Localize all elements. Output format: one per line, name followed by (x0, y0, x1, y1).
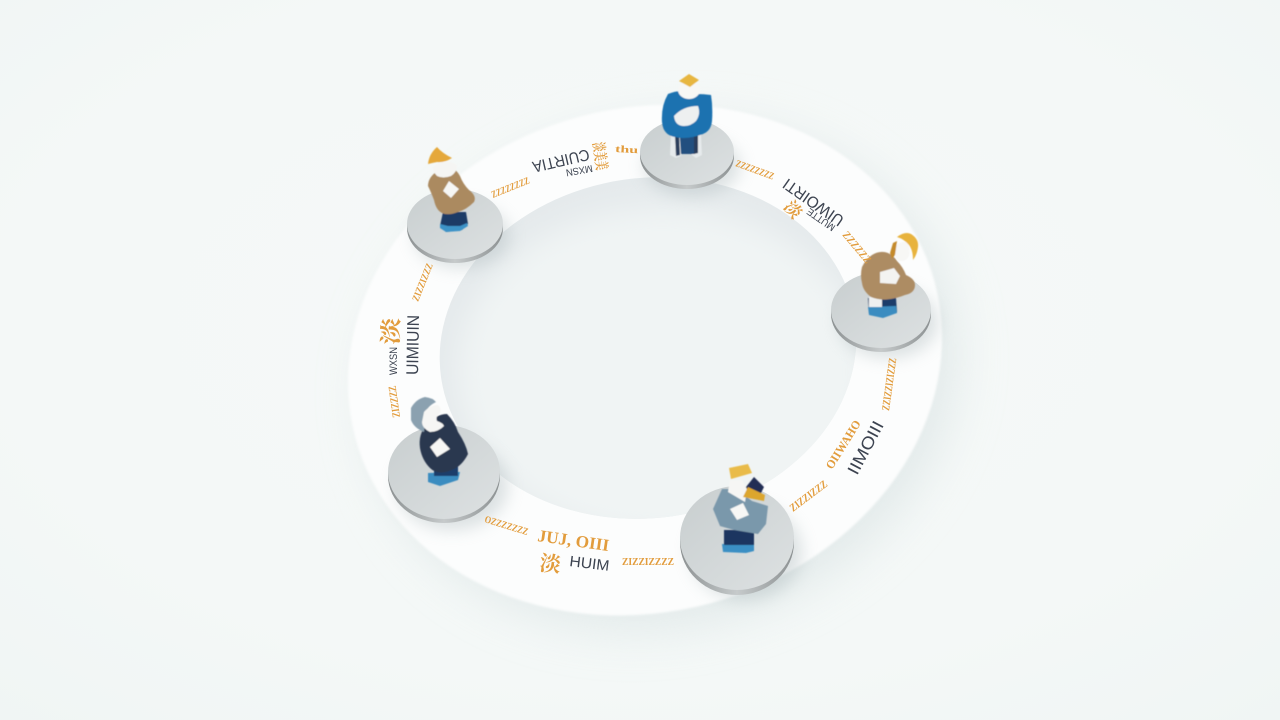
ring label: bottom (483, 514, 674, 577)
ring label: bottom: 淡 (538, 551, 563, 577)
ring label: upper left: MXSN (565, 162, 593, 178)
disc: bottom right (680, 486, 802, 600)
figure: brown, right (861, 233, 918, 318)
ring label: right: ZZIZZIZIZZZ (880, 357, 899, 411)
ring label: upper left: thu (615, 144, 639, 156)
ring label: left: UIMIUIN (403, 315, 423, 375)
ring platform (436, 178, 961, 633)
ring label: right: OIIWAHO (823, 418, 864, 472)
ring label: left: WXSN (388, 347, 400, 375)
disc: right (831, 272, 938, 358)
ring label: upper right: ZZZZZZ (840, 229, 873, 266)
ring label: upper left: CUIRTIA (530, 145, 591, 175)
ring label: upper right: ZZZZZZZZ (734, 158, 776, 183)
ring label: bottom: JUJ, OIII (536, 526, 611, 555)
ring label: right: ZIZZIZZZ (788, 478, 830, 514)
disc: top left (407, 189, 510, 268)
ring label: left (378, 262, 436, 418)
ring label: upper right: UIWOIRTI (780, 175, 847, 229)
figure: brown, top left (428, 147, 475, 232)
ring label: upper left: ZZZZZZZZ (490, 176, 531, 201)
ring label: upper left (490, 141, 639, 201)
figure: navy, bottom left (411, 397, 468, 486)
ring label: upper right: 淡 (780, 197, 806, 223)
ring label: bottom: HUIM (569, 553, 610, 575)
ring inner well (440, 178, 856, 519)
ring label: upper left: 淡美美 (589, 141, 611, 171)
ring label: bottom: OZZZZZZZ (483, 514, 530, 538)
ring label: bottom: ZIZZIZZZZ (622, 557, 674, 568)
ring label: left: ZIZZZZ (387, 385, 403, 418)
ring label: upper right: MUTTE (805, 205, 838, 233)
ring label: upper right (734, 158, 873, 266)
ring label: right: IIMOIII (844, 418, 888, 478)
disc: top (640, 119, 740, 196)
ring label: right (788, 357, 899, 514)
figure: slate, bottom right (713, 464, 768, 553)
ring label: left: 淡 (378, 316, 404, 345)
ring label: left: ZIZZIZZZ (411, 262, 436, 303)
figure: blue, top (662, 74, 712, 158)
disc: bottom left (388, 425, 508, 530)
